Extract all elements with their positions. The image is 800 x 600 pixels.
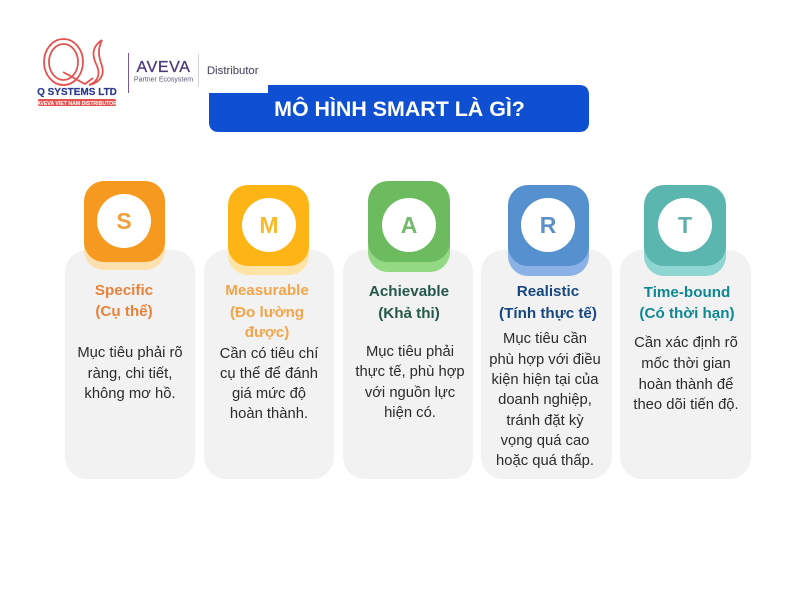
text: Time-bound description: hoàn thành để	[639, 377, 733, 393]
panel: Achievable	[343, 181, 473, 479]
panel: Realistic	[481, 185, 612, 479]
title banner	[209, 85, 589, 132]
icon: S: S	[116, 208, 132, 234]
text: Time-bound description: Cần xác định rõ	[634, 335, 738, 351]
text: Measurable description: hoàn thành.	[230, 406, 308, 422]
text: Achievable description: thực tế, phù hợp	[355, 364, 465, 380]
text: Realistic description: hoặc quá thấp.	[496, 453, 594, 469]
icon: A: A	[401, 212, 417, 238]
heading: Measurable: (Đo lường	[230, 304, 304, 321]
panel: Measurable	[204, 185, 334, 479]
heading: Realistic: (Tính thực tế)	[499, 305, 597, 322]
text: Time-bound description: mốc thời gian	[641, 356, 731, 372]
logo: AVEVA Partner Ecosystem Distributor: AVEVA	[137, 59, 190, 76]
text: Realistic description: doanh nghiệp,	[498, 392, 592, 408]
text: Achievable description: hiện có.	[384, 405, 436, 421]
heading: Achievable: Achievable	[369, 283, 449, 300]
text: Specific description: không mơ hồ.	[84, 386, 176, 402]
text: Realistic description: phù hợp với điều	[489, 352, 601, 368]
logo: Q Systems: AVEVA VIET NAM DISTRIBUTOR	[37, 101, 117, 107]
title banner: MÔ HÌNH SMART LÀ GÌ?	[274, 96, 525, 121]
text: Realistic description: tránh đặt kỳ	[506, 413, 584, 429]
icon: A	[368, 181, 450, 272]
text: Realistic description: vọng quá cao	[501, 433, 589, 449]
text: Achievable description: với nguồn lực	[365, 385, 456, 401]
icon: T	[644, 185, 726, 276]
heading: Time-bound: (Có thời hạn)	[639, 305, 735, 322]
text: Measurable description: giá mức độ	[232, 386, 306, 402]
icon: R	[508, 185, 589, 276]
heading: Specific: Specific	[95, 282, 153, 299]
heading: Measurable: Measurable	[225, 282, 309, 299]
logo: Q Systems	[37, 39, 117, 107]
logo: AVEVA Partner Ecosystem Distributor: Distributor	[207, 65, 259, 77]
text: Time-bound description: theo dõi tiến độ.	[633, 397, 739, 413]
text: Specific description: ràng, chi tiết,	[88, 366, 172, 382]
text: Achievable description	[355, 344, 465, 421]
heading: Measurable: được)	[245, 324, 289, 341]
icon: S	[84, 181, 165, 270]
heading: Realistic	[499, 283, 597, 322]
text: Specific description	[77, 345, 183, 402]
text: Time-bound description	[633, 335, 739, 413]
text: Measurable description	[220, 346, 319, 422]
heading: Specific	[95, 282, 153, 320]
text: Realistic description: kiện hiện tại của	[492, 372, 599, 388]
icon: M: M	[259, 212, 279, 238]
heading: Time-bound: Time-bound	[644, 284, 730, 301]
icon: R: R	[540, 212, 557, 238]
text: Measurable description: cụ thể để đánh	[220, 366, 318, 382]
heading: Specific: (Cụ thể)	[95, 303, 153, 320]
heading: Achievable: (Khả thi)	[378, 305, 440, 322]
text: Realistic description	[489, 331, 601, 469]
logo: AVEVA Partner Ecosystem Distributor: Partner Ecosystem	[134, 76, 193, 84]
panel: Specific	[65, 181, 195, 479]
logo: AVEVA Partner Ecosystem Distributor	[128, 53, 259, 93]
icon: T: T	[678, 212, 692, 238]
text: Specific description: Mục tiêu phải rõ	[77, 345, 183, 361]
heading: Realistic: Realistic	[517, 283, 579, 300]
heading: Measurable	[225, 282, 309, 341]
icon: M	[228, 185, 309, 275]
heading: Time-bound	[639, 284, 735, 322]
text: Realistic description: Mục tiêu cần	[503, 331, 587, 347]
text: Achievable description: Mục tiêu phải	[366, 344, 454, 360]
heading: Achievable	[369, 283, 449, 322]
text: Measurable description: Cần có tiêu chí	[220, 346, 319, 362]
panel: Time-bound	[620, 185, 751, 479]
logo: Q Systems: Q SYSTEMS LTD	[37, 87, 117, 98]
